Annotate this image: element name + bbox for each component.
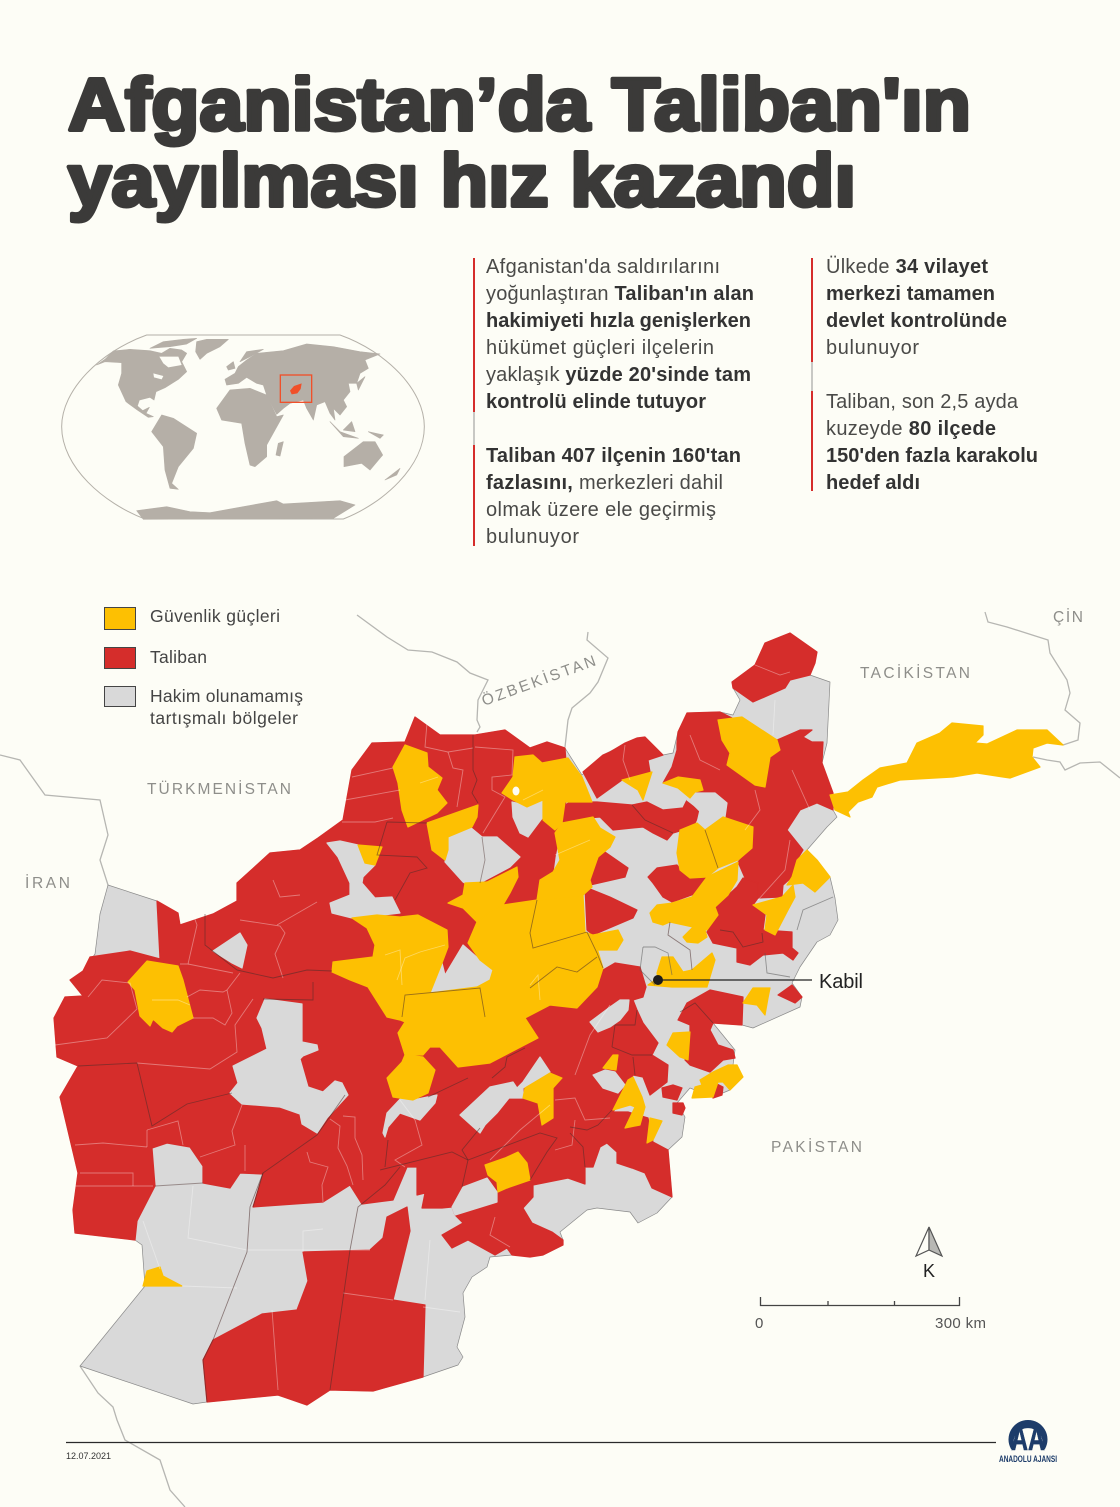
country labels: ÇİN (1053, 608, 1083, 626)
date: 12.07.2021 (66, 1451, 111, 1461)
text block: left column: olmak üzere ele geçirmiş (486, 499, 716, 521)
Anadolu Ajansi logo: ANADOLU AJANSI (999, 1454, 1057, 1464)
text block: right column: merkezi tamamen (826, 283, 995, 305)
country labels: TACİKİSTAN (860, 664, 970, 682)
north arrow (916, 1227, 942, 1281)
white lake (512, 786, 520, 796)
text block: right column: hedef aldı (826, 472, 920, 494)
legend: Taliban (104, 647, 207, 668)
neighbouring borders (0, 612, 1120, 1507)
text block: right column: devlet kontrolünde (826, 310, 1007, 332)
legend: Taliban: Taliban (150, 647, 207, 667)
text block: left column: bulunuyor (486, 526, 579, 548)
text block: right column: Taliban, son 2,5 ayda (826, 391, 1019, 413)
text block: right column (811, 256, 1038, 494)
text block: left column: yoğunlaştıran Taliban'ın alan (486, 283, 754, 305)
text block: left column: kontrolü elinde tutuyor (486, 391, 706, 413)
footer rule (66, 1442, 996, 1444)
text block: right column: 150'den fazla karakolu (826, 445, 1038, 467)
accent bars left (473, 258, 475, 546)
scale bar (755, 1297, 986, 1332)
district boundaries (55, 665, 810, 1390)
Taliban controlled areas (54, 633, 833, 1405)
legend: contested (104, 686, 303, 728)
scale bar: 0 (755, 1315, 763, 1332)
text block: right column: Ülkede 34 vilayet (826, 256, 988, 278)
province boundaries (78, 735, 833, 1402)
text block: left column: Afganistan'da saldırılarını (486, 256, 720, 278)
legend: contested: Hakim olunamamış (150, 686, 303, 706)
text block: left column: Taliban 407 ilçenin 160'tan (486, 445, 741, 467)
Kabul marker and label (653, 971, 863, 993)
title (68, 63, 971, 222)
text block: left column: fazlasını, merkezleri dahil (486, 472, 723, 494)
legend (104, 606, 303, 728)
title: yayılması hız kazandı (68, 139, 856, 222)
legend: security forces: Güvenlik güçleri (150, 606, 280, 626)
scale bar: 300 km (935, 1315, 986, 1332)
text block: left column: hükümet güçleri ilçelerin (486, 337, 714, 359)
text block: left column: hakimiyeti hızla genişlerken (486, 310, 751, 332)
country labels: İRAN (25, 874, 70, 892)
locator box (280, 375, 312, 402)
map of Afghanistan (54, 633, 1063, 1405)
country labels: PAKİSTAN (771, 1138, 862, 1156)
country labels: ÖZBEKİSTAN (479, 652, 598, 710)
contested holes within Taliban areas (213, 793, 727, 1215)
north arrow: K (923, 1261, 935, 1281)
country labels (25, 608, 1083, 1156)
country labels: TÜRKMENİSTAN (147, 780, 291, 798)
security forces areas (128, 717, 1063, 1286)
text block: right column: kuzeyde 80 ilçede (826, 418, 996, 440)
title: Afganistan’da Taliban'ın (68, 63, 971, 146)
Afghanistan marker (290, 383, 302, 394)
Anadolu Ajansi logo: AA (1011, 1420, 1045, 1457)
Kabul marker and label: Kabil (819, 971, 863, 993)
uncontrolled territory base (54, 633, 838, 1405)
legend: contested: tartışmalı bölgeler (150, 708, 298, 728)
text block: left column: yaklaşık yüzde 20'sinde tam (486, 364, 751, 386)
text block: right column: bulunuyor (826, 337, 919, 359)
accent bars right (811, 258, 813, 491)
Anadolu Ajansi logo (999, 1420, 1057, 1464)
text block: left column (473, 256, 754, 548)
legend: security forces (104, 606, 280, 630)
world locator map (62, 335, 424, 519)
